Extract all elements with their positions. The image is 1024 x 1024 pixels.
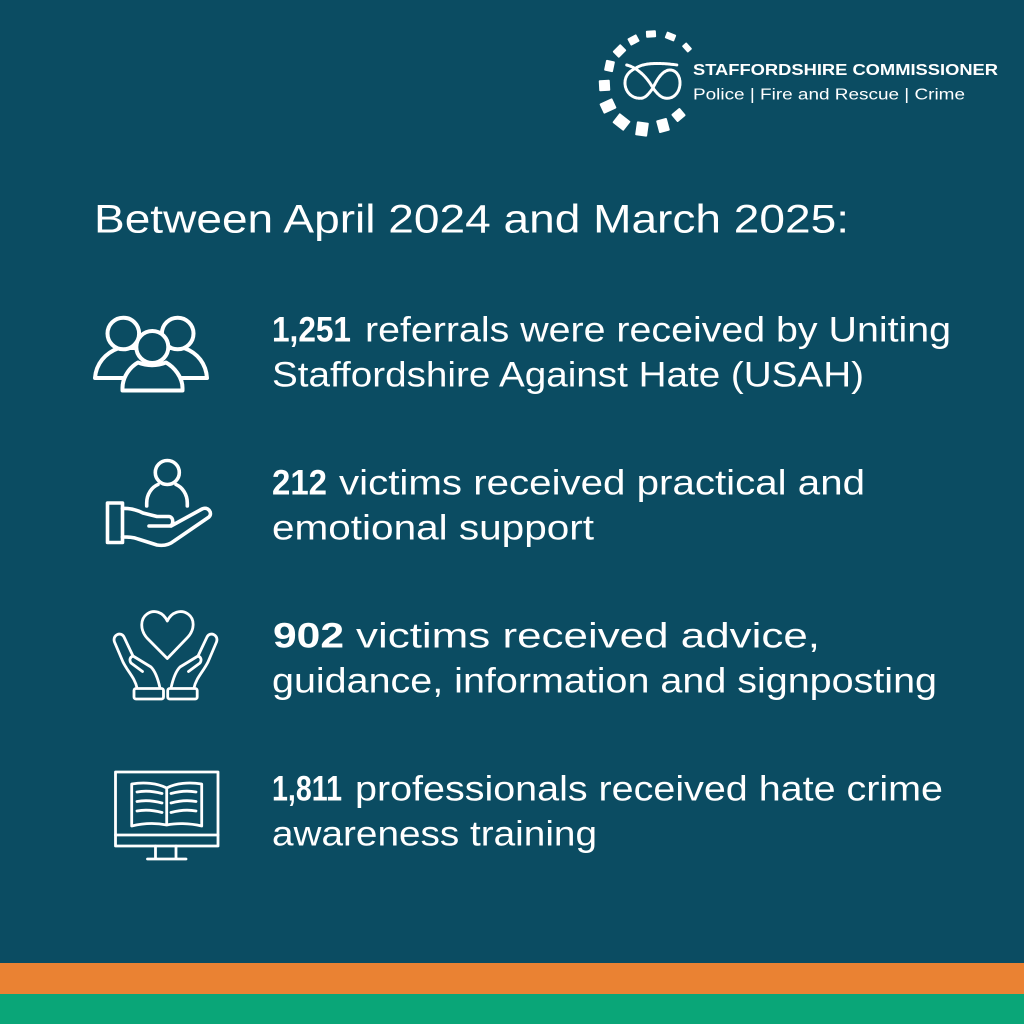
icon: group of people (95, 318, 207, 390)
row 4: professionals trained (116, 770, 943, 859)
text: 212 victims: 212 (272, 464, 327, 503)
icon: hand holding person (108, 460, 210, 545)
text: 902 victims: guidance, information and signposting (272, 661, 937, 700)
text: 1,251 referrals: referrals were received by Uniting (365, 311, 951, 350)
logo name: STAFFORDSHIRE COMMISSIONER (693, 62, 999, 79)
logo ring of stones (600, 31, 691, 136)
row 1: referrals (95, 311, 951, 394)
text: 1,251 referrals: Staffordshire Against Hate (USAH) (272, 355, 864, 394)
text: 902 victims: 902 (273, 617, 344, 656)
logo knot (625, 63, 680, 98)
row 3: advice and guidance (114, 612, 937, 700)
heading: Between April 2024 and March 2025: (94, 197, 849, 241)
text: 1,811 professionals: professionals received hate crime (355, 770, 943, 809)
text: 1,811 professionals: awareness training (272, 814, 597, 853)
text: 212 victims: victims received practical and (339, 464, 865, 503)
text: 212 victims: emotional support (272, 508, 594, 547)
icon: book on computer screen (116, 772, 218, 859)
row 2: practical and emotional support (108, 460, 865, 547)
text: 1,251 referrals: 1,251 (272, 311, 351, 350)
logo: Staffordshire Commissioner (600, 31, 999, 136)
text: 1,251 referrals (272, 311, 951, 394)
text: 1,811 professionals (272, 770, 943, 853)
text: 902 victims (272, 617, 937, 700)
logo tagline: Police | Fire and Rescue | Crime (693, 86, 965, 104)
text: 1,811 professionals: 1,811 (272, 770, 342, 809)
text: 212 victims (272, 464, 865, 547)
text: 902 victims: victims received advice, (356, 617, 820, 656)
green footer band (0, 994, 1024, 1024)
orange footer band (0, 963, 1024, 994)
icon: hands holding heart (114, 612, 217, 699)
